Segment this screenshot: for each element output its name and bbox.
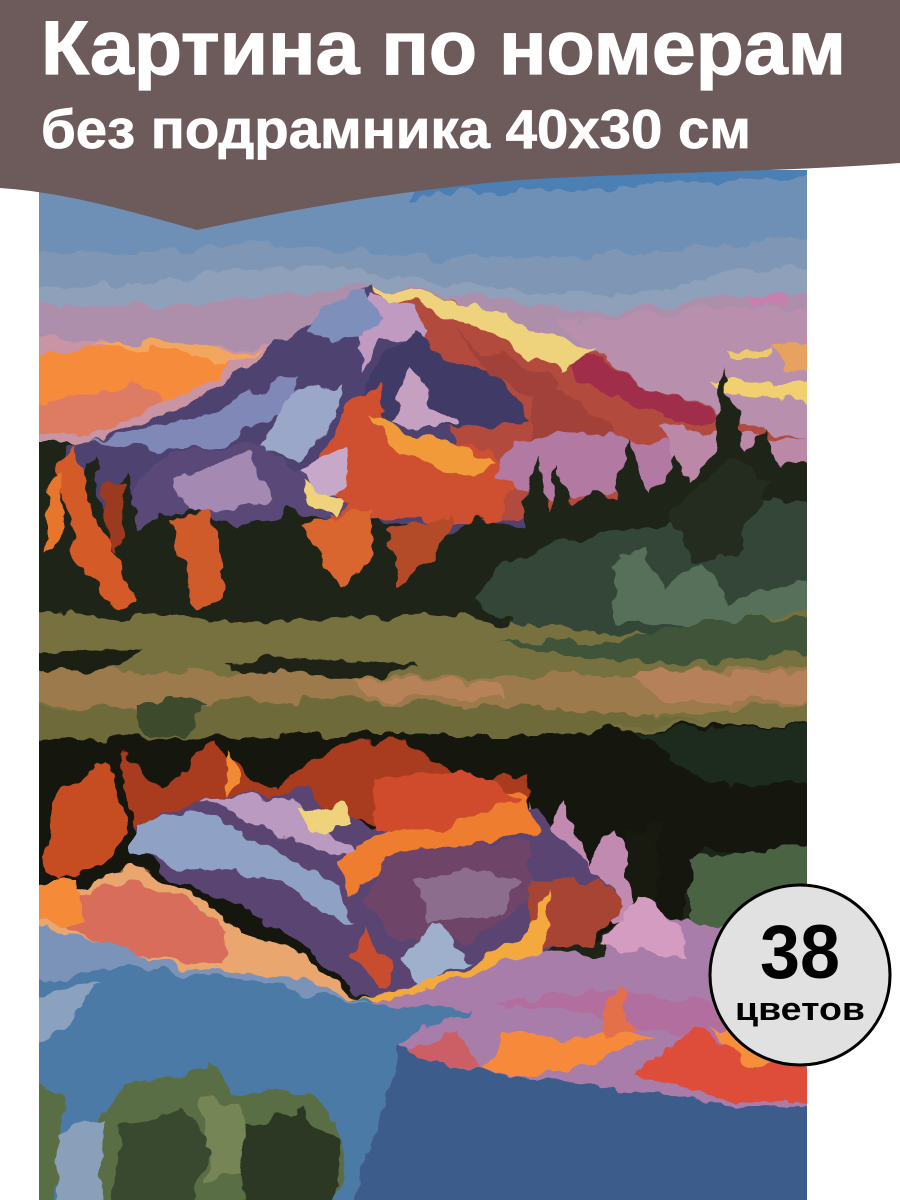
- sunset clouds right: [558, 292, 807, 439]
- badge: 38 colours: 38: [760, 910, 840, 995]
- mountain: [60, 284, 830, 530]
- badge: 38 colours: цветов: [735, 991, 865, 1027]
- sunset clouds left: [39, 334, 271, 445]
- mountain reflection: [130, 770, 625, 1005]
- subtitle: без подрамника 40х30 см: [41, 98, 751, 160]
- title: Картина по номерам: [41, 6, 846, 91]
- forest: [20, 370, 830, 650]
- left sunset reflection: [20, 865, 370, 1005]
- meadow: [20, 610, 830, 745]
- painting: mountain lake at sunset: [20, 150, 830, 1200]
- header banner: [0, 0, 900, 230]
- badge: 38 colours: [710, 885, 890, 1065]
- sky: [39, 170, 807, 354]
- base underpainting: [39, 440, 742, 1092]
- lake reflection: dark water: [20, 725, 830, 1000]
- reflected shrubs bottom left: [20, 1062, 345, 1200]
- blue water: [20, 965, 830, 1200]
- right sunset reflection: [370, 895, 830, 1110]
